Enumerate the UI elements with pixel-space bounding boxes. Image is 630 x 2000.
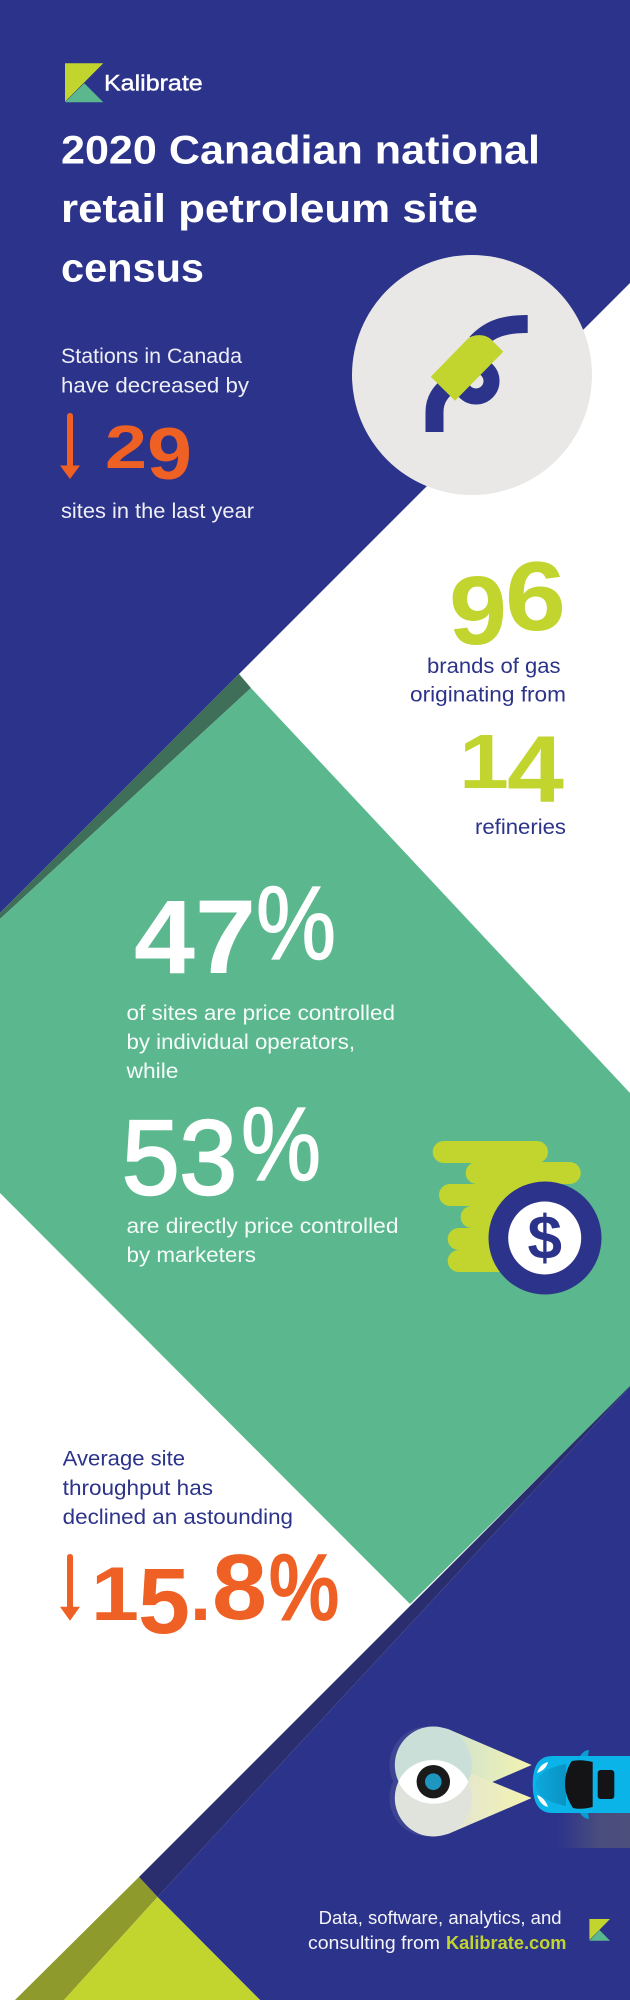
text: average throughput: Average site [63, 1448, 185, 1471]
stat: 29 [105, 413, 192, 495]
text: average throughput: throughput has [63, 1477, 213, 1500]
footer text [308, 1907, 566, 1953]
stat: 96 brands: 6 [505, 541, 566, 651]
upper lobe [395, 1726, 472, 1804]
text: stations intro: have decreased by [61, 374, 250, 398]
stat: 14 refineries [459, 717, 566, 839]
footer text: consulting from [308, 1932, 440, 1953]
stat: 29: 9 [147, 414, 192, 495]
background: dark green shadow band [0, 674, 251, 919]
background: dark navy shadow band [139, 1386, 630, 1897]
stat: 96 brands: 9 [449, 556, 507, 665]
icon: gas pump nozzle [352, 255, 592, 495]
stat: 15.8 percent: % [269, 1537, 339, 1639]
eye [398, 1760, 468, 1804]
background: lime corner triangle [64, 1897, 260, 2000]
text: operators [125, 1002, 395, 1083]
stat: 47 percent: % [256, 866, 336, 982]
background: top navy panel [0, 0, 630, 913]
text: operators: of sites are price controlled [126, 1002, 395, 1025]
background: olive corner band [15, 1877, 158, 2000]
icon: stack of coins: $ [527, 1204, 562, 1273]
stat: 47 percent [134, 866, 336, 996]
lobes halo [390, 1726, 466, 1836]
arrow: down, stations [60, 413, 80, 479]
text: sites in the last year: sites in the last year [61, 500, 254, 523]
text: average throughput [63, 1448, 293, 1529]
lower light cone [433, 1760, 532, 1836]
text: stations intro [61, 345, 250, 398]
footer text: Kalibrate.com [446, 1932, 566, 1953]
text: operators: while [125, 1060, 178, 1083]
logo: Kalibrate [65, 63, 203, 102]
stat: 53 percent: % [241, 1087, 321, 1203]
stat: 14 refineries: refineries [475, 816, 566, 839]
text: marketers: are directly price controlled [126, 1215, 398, 1238]
text: marketers [126, 1215, 398, 1267]
stat: 15.8 percent: . [190, 1552, 211, 1637]
stat: 15.8 percent: 8 [212, 1535, 267, 1639]
background: bottom navy panel [158, 1387, 630, 2000]
stat: 29: 2 [105, 413, 147, 481]
logo: small Kalibrate mark [589, 1919, 610, 1941]
stat: 15.8 percent: 1 [91, 1552, 139, 1637]
stat: 96 brands: brands of gas [427, 655, 560, 678]
stat: 14 refineries: 1 [459, 719, 509, 805]
stat: 96 brands [410, 541, 566, 707]
title: census [61, 247, 204, 291]
text: marketers: by marketers [126, 1244, 256, 1267]
stat: 14 refineries: 4 [507, 717, 564, 823]
car [533, 1750, 630, 1819]
stat: 15.8 percent [91, 1535, 339, 1653]
illustration: eye and car headlights [390, 1726, 630, 1848]
stat: 53 percent: 53 [122, 1099, 237, 1217]
footer text: Data, software, analytics, and [319, 1907, 562, 1928]
logo: Kalibrate: Kalibrate [104, 71, 203, 96]
background: green panel [0, 688, 630, 1604]
stat: 53 percent [122, 1087, 321, 1217]
text: stations intro: Stations in Canada [61, 345, 242, 368]
text: average throughput: declined an astounding [63, 1506, 293, 1529]
title [61, 128, 540, 291]
text: operators: by individual operators, [126, 1031, 355, 1054]
road shadow [557, 1813, 630, 1848]
arrow: down, throughput [60, 1554, 80, 1621]
stat: 96 brands: originating from [410, 684, 566, 707]
lower lobe [395, 1760, 472, 1836]
stat: 15.8 percent: 5 [138, 1549, 190, 1653]
icon: stack of coins [433, 1141, 602, 1294]
title: retail petroleum site [61, 187, 478, 231]
stat: 47 percent: 47 [134, 879, 256, 996]
upper light cone [433, 1726, 532, 1803]
title: 2020 Canadian national [61, 128, 540, 172]
